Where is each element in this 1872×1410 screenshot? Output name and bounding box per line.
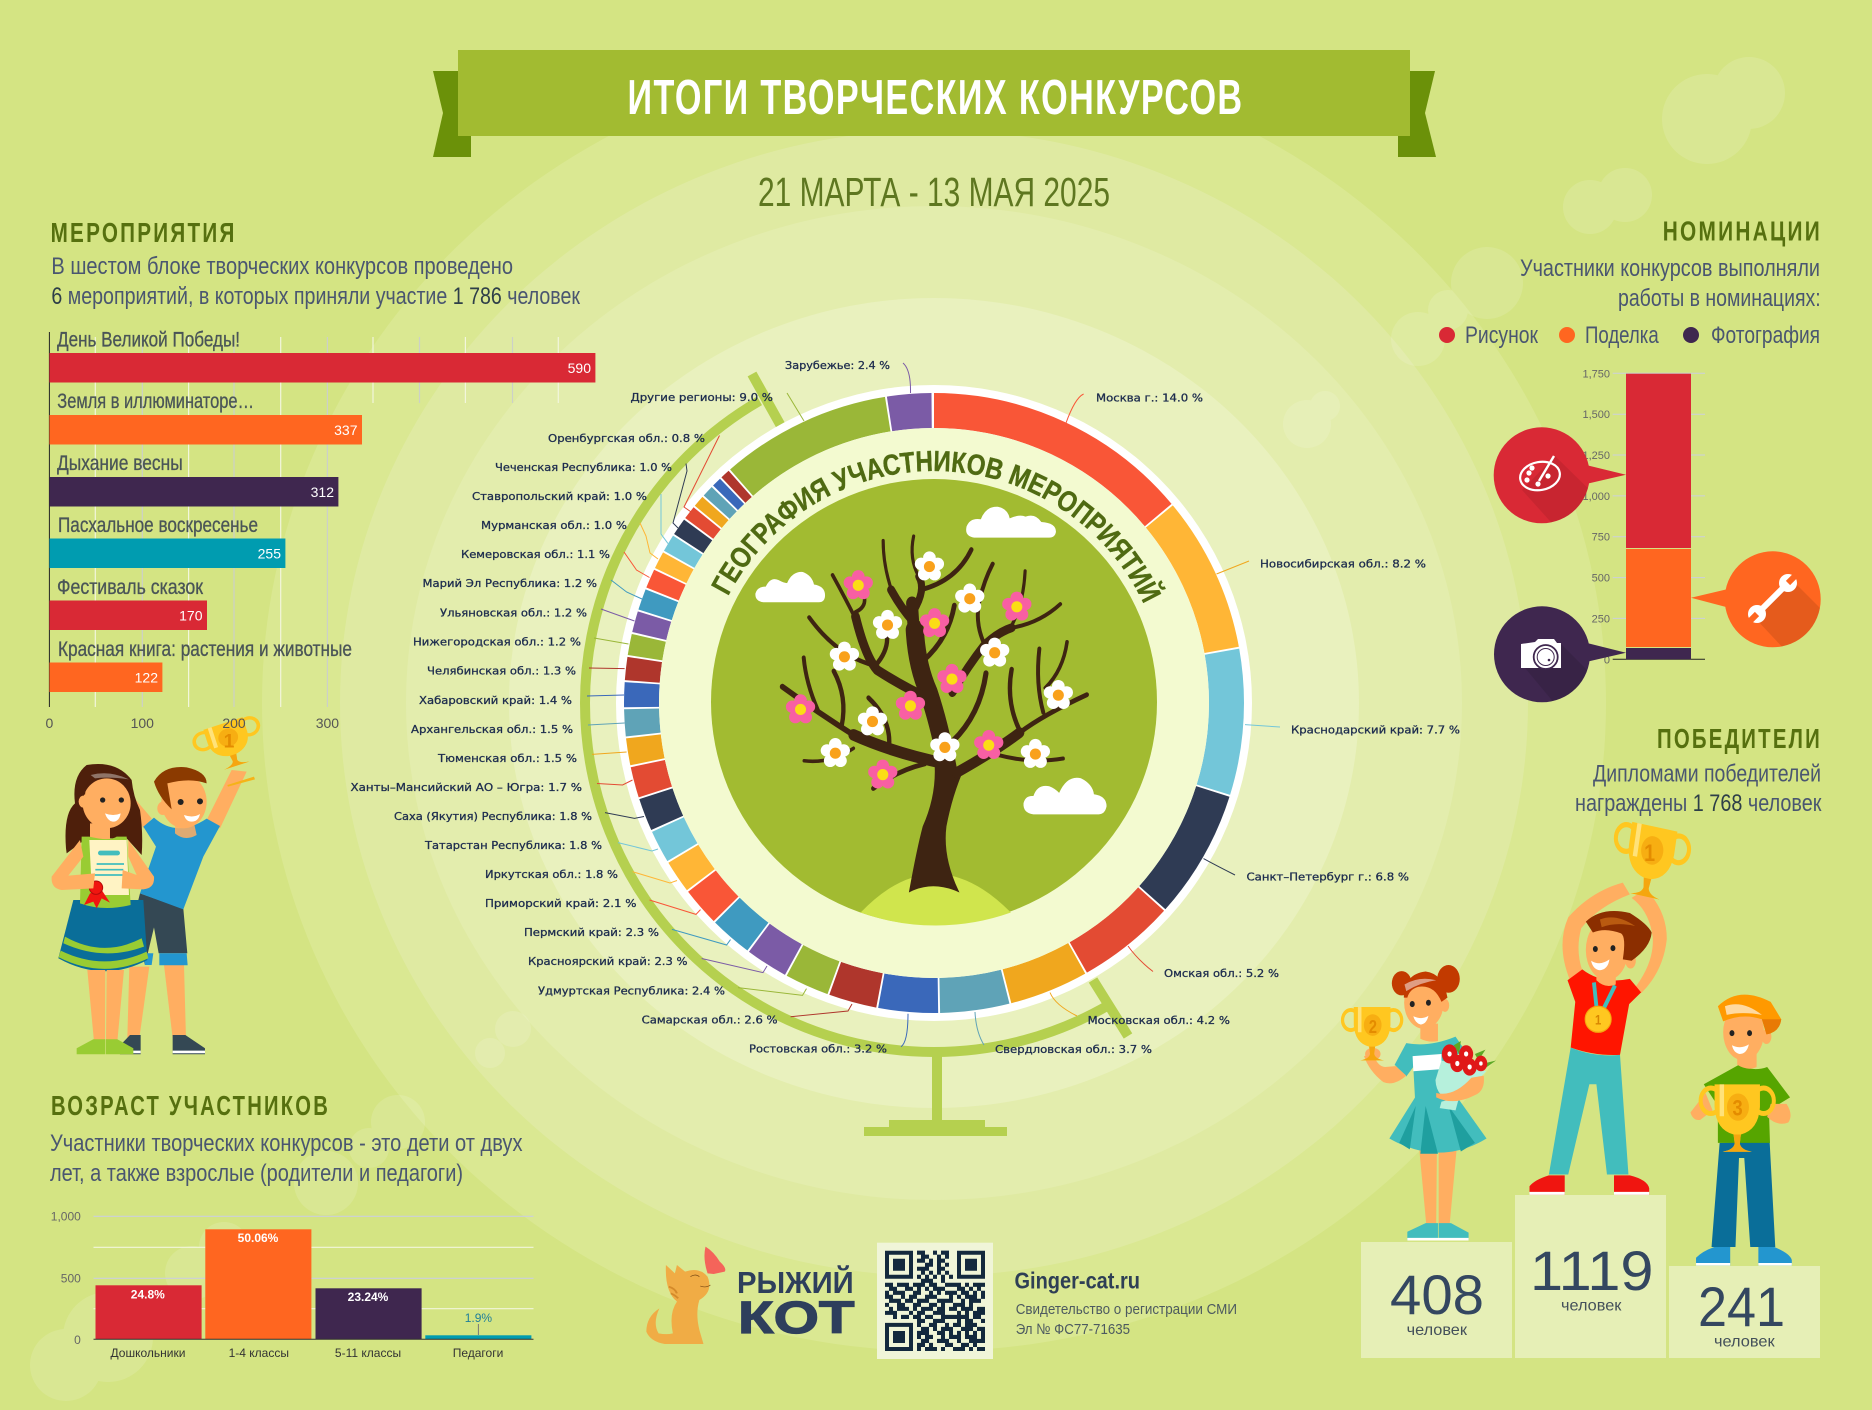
column chart: age: Педагоги (453, 1346, 503, 1360)
callout: crafts (1691, 551, 1830, 650)
column chart: age: 1.9% (465, 1311, 492, 1325)
podium: человек (1407, 1322, 1468, 1339)
bar chart: events: 300 (316, 715, 339, 731)
date subtitle: 21 МАРТА - 13 МАЯ 2025 (758, 169, 1110, 215)
text: events description: 6 мероприятий, в которых приняли участие 1 786 человек (51, 283, 580, 310)
heading: age: ВОЗРАСТ УЧАСТНИКОВ (51, 1090, 330, 1121)
illustration: third place boy (1690, 995, 1792, 1266)
bar chart: events: Дыхание весны (57, 452, 183, 475)
bar chart: events: 122 (135, 670, 158, 686)
bar chart: events: День Великой Победы! (57, 328, 240, 351)
logo wordmark (737, 1264, 854, 1343)
column chart: age: 23.24% (348, 1290, 389, 1304)
bar chart: events: 590 (568, 360, 591, 376)
text: age description: лет, а также взрослые (родители и педагоги) (50, 1160, 463, 1187)
legend: Фотография (1711, 322, 1820, 349)
callout: drawing (1494, 427, 1626, 530)
bar chart: events: 170 (179, 608, 203, 624)
column chart: age: 50.06% (238, 1231, 279, 1245)
region labels: Ставропольский край: 1.0 % (472, 490, 647, 503)
region labels: Ростовская обл.: 3.2 % (749, 1043, 887, 1056)
bar chart: events: 337 (334, 422, 358, 438)
region labels: Новосибирская обл.: 8.2 % (1260, 558, 1426, 571)
stacked bar chart: 250 (1592, 613, 1610, 625)
column chart: age: 1,000 (51, 1210, 81, 1224)
podium: человек (1714, 1334, 1776, 1351)
legend (1439, 322, 1820, 349)
text: age description: Участники творческих конкурсов - это дети от двух (50, 1130, 522, 1157)
text: winners description (1575, 761, 1822, 817)
stacked bar chart: 1,750 (1582, 368, 1610, 380)
panel: winners (1343, 723, 1822, 1358)
callout: photo (1494, 606, 1626, 710)
footer text: site and registration: Ginger-cat.ru (1014, 1267, 1140, 1293)
footer text: site and registration (1014, 1267, 1237, 1338)
region labels: Челябинская обл.: 1.3 % (427, 665, 576, 678)
bar chart: events: Фестиваль сказок (57, 576, 204, 599)
podium: 1119 (1530, 1239, 1654, 1302)
logo: ginger cat (646, 1247, 854, 1344)
column chart: age: Дошкольники (111, 1346, 185, 1360)
region labels: Приморский край: 2.1 % (485, 897, 636, 910)
illustration: first place boy: 1 (1644, 839, 1655, 866)
text: nominations description: работы в номинациях: (1618, 285, 1821, 312)
region labels: Хабаровский край: 1.4 % (419, 694, 572, 707)
column chart: age: 1-4 классы (229, 1346, 289, 1360)
stacked bar chart: 750 (1592, 532, 1610, 544)
podium: 241 (1698, 1275, 1785, 1338)
region labels: Омская обл.: 5.2 % (1164, 967, 1279, 980)
footer text: site and registration: Эл № ФС77-71635 (1016, 1321, 1130, 1338)
text: events description: В шестом блоке творческих конкурсов проведено (51, 253, 513, 280)
bar chart: events: Пасхальное воскресенье (58, 514, 258, 537)
region labels: Марий Эл Республика: 1.2 % (422, 577, 597, 590)
region labels: Зарубежье: 2.4 % (785, 359, 890, 372)
bar chart: events: 200 (222, 715, 246, 731)
bar chart: events: 0 (46, 715, 54, 731)
heading: events: МЕРОПРИЯТИЯ (51, 217, 237, 248)
text: age description (50, 1130, 522, 1187)
region labels (350, 359, 1460, 1056)
region labels: Нижегородская обл.: 1.2 % (413, 636, 581, 648)
illustration: first place boy: 1 (1595, 1012, 1601, 1028)
donut segments (642, 410, 1226, 996)
globe stand (585, 374, 1128, 1136)
region labels: Московская обл.: 4.2 % (1088, 1014, 1230, 1027)
region labels: Удмуртская Республика: 2.4 % (538, 984, 725, 998)
legend: Поделка (1585, 322, 1659, 349)
panel: geography donut chart (350, 359, 1460, 1056)
panel: participants age (50, 1090, 534, 1360)
region labels: Саха (Якутия) Республика: 1.8 % (394, 810, 592, 823)
stacked bar chart: 1,000 (1582, 491, 1610, 503)
bar chart: events (46, 328, 595, 731)
text: winners description: Дипломами победителей (1593, 761, 1821, 788)
curved heading: geography: ГЕОГРАФИЯ УЧАСТНИКОВ МЕРОПРИЯТИЙ (711, 450, 1166, 604)
leader lines (587, 363, 1280, 1047)
illustration: girl with diploma and boy with trophy: 1 (224, 731, 235, 752)
stacked bar chart (1582, 368, 1705, 666)
panel: events (46, 217, 595, 731)
region labels: Оренбургская обл.: 0.8 % (548, 432, 705, 445)
logo wordmark: РЫЖИЙ (737, 1264, 854, 1300)
text: winners description: награждены 1 768 человек (1575, 790, 1822, 817)
stacked bar chart: 1,500 (1582, 409, 1610, 421)
illustration: blossoming tree (755, 507, 1107, 926)
panel: nominations (1439, 216, 1830, 710)
illustration: second place girl: 2 (1369, 1017, 1377, 1038)
bar chart: events: 100 (131, 715, 154, 731)
column chart: age: 5-11 классы (335, 1346, 401, 1360)
bar chart: events: Красная книга: растения и животные (58, 638, 352, 661)
region labels: Пермский край: 2.3 % (524, 926, 659, 939)
region labels: Татарстан Республика: 1.8 % (424, 839, 602, 852)
region labels: Кемеровская обл.: 1.1 % (461, 548, 610, 561)
illustration: girl with diploma and boy with trophy (52, 713, 268, 1054)
title banner (433, 50, 1436, 157)
region labels: Красноярский край: 2.3 % (528, 955, 688, 968)
heading: nominations: НОМИНАЦИИ (1663, 216, 1822, 247)
stacked bar chart: 0 (1604, 654, 1610, 666)
region labels: Мурманская обл.: 1.0 % (481, 519, 627, 532)
bar chart: events: 255 (258, 546, 281, 562)
bar chart: events: Земля в иллюминаторе… (57, 390, 254, 413)
podium: человек (1561, 1298, 1622, 1315)
illustration: first place boy (1529, 819, 1691, 1195)
region labels: Ханты–Мансийский АО – Югра: 1.7 % (350, 781, 582, 794)
legend: Рисунок (1465, 322, 1538, 349)
region labels: Другие регионы: 9.0 % (630, 391, 773, 404)
illustration: third place boy: 3 (1733, 1096, 1743, 1121)
column chart: age (51, 1210, 534, 1360)
region labels: Самарская обл.: 2.6 % (642, 1014, 778, 1027)
title banner: ИТОГИ ТВОРЧЕСКИХ КОНКУРСОВ (628, 71, 1244, 125)
region labels: Краснодарский край: 7.7 % (1291, 724, 1460, 736)
icon: cat with butterfly (646, 1247, 725, 1344)
text: nominations description (1520, 255, 1821, 312)
illustration: second place girl (1343, 965, 1496, 1240)
footer text: site and registration: Свидетельство о регистрации СМИ (1016, 1301, 1237, 1318)
column chart: age: 500 (61, 1272, 81, 1286)
region labels: Ульяновская обл.: 1.2 % (440, 606, 587, 619)
region labels: Москва г.: 14.0 % (1096, 391, 1203, 404)
logo wordmark: КОТ (738, 1292, 854, 1343)
QR code (877, 1243, 993, 1359)
bar chart: events: 312 (311, 484, 334, 500)
text: events description (51, 253, 580, 310)
region labels: Санкт–Петербург г.: 6.8 % (1246, 870, 1409, 884)
stacked bar chart: 1,250 (1582, 450, 1610, 462)
podium: 408 (1390, 1263, 1484, 1326)
stacked bar chart: 500 (1592, 573, 1610, 585)
region labels: Иркутская обл.: 1.8 % (485, 868, 618, 881)
region labels: Архангельская обл.: 1.5 % (411, 723, 573, 736)
column chart: age: 24.8% (131, 1288, 165, 1302)
region labels: Тюменская обл.: 1.5 % (437, 752, 577, 765)
region labels: Чеченская Республика: 1.0 % (495, 461, 672, 474)
column chart: age: 0 (74, 1333, 81, 1347)
podium (1361, 1195, 1820, 1358)
region labels: Свердловская обл.: 3.7 % (995, 1043, 1152, 1056)
